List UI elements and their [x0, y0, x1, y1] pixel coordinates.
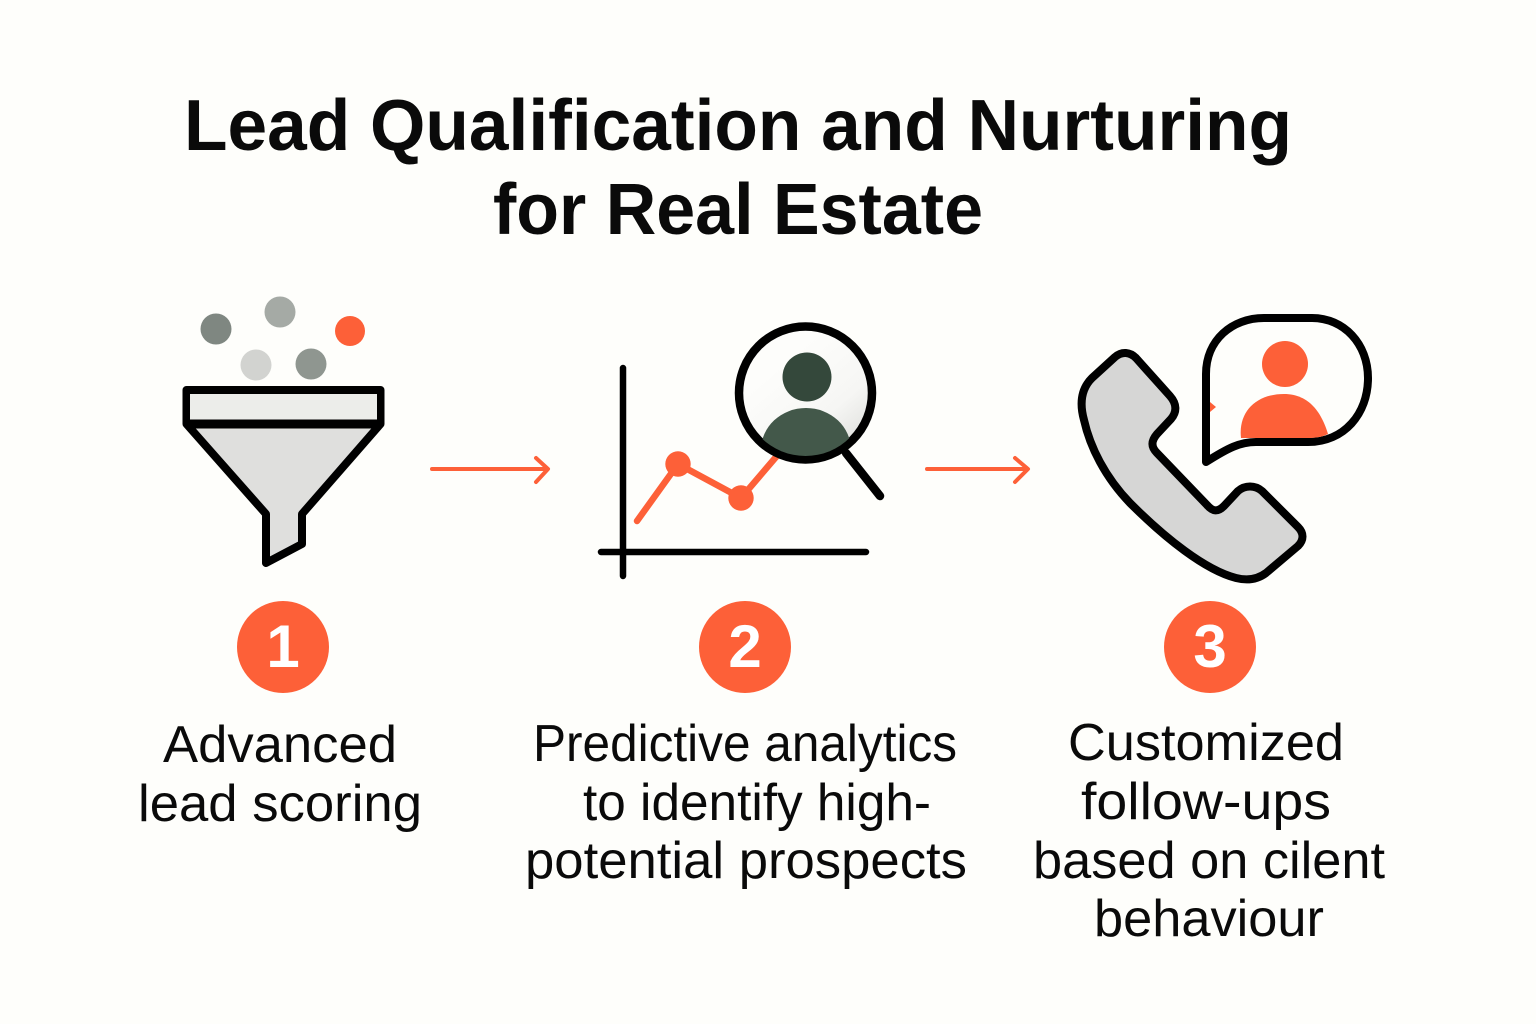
step 3 text: Customized [1068, 714, 1344, 772]
step 3 text: based on cilent [1033, 832, 1386, 890]
title: for Real Estate [493, 170, 983, 250]
arrow 2 [927, 458, 1028, 482]
arrow 1 [432, 458, 548, 482]
step 2 text: Predictive analytics [533, 715, 957, 773]
step 1 text: lead scoring [138, 775, 422, 833]
step 2 text [525, 715, 967, 890]
step 3 badge: 3 [1193, 613, 1227, 680]
step 1 text: Advanced [163, 716, 397, 774]
title: Lead Qualification and Nurturing [184, 86, 1292, 166]
step 3 text: behaviour [1094, 890, 1324, 948]
icon: funnel with leads [186, 296, 380, 563]
icon: chart with magnifier [601, 326, 880, 576]
step 3 text: follow-ups [1081, 773, 1331, 831]
title [184, 86, 1292, 250]
icon: phone with speech bubble [1082, 318, 1368, 579]
step 3 badge [1164, 601, 1256, 693]
step 2 text: potential prospects [525, 832, 967, 890]
step 1 text [138, 716, 422, 833]
step 1 badge [237, 601, 329, 693]
step 2 badge [699, 601, 791, 693]
step 1 badge: 1 [266, 613, 300, 680]
step 2 badge: 2 [728, 613, 762, 680]
step 3 text [1033, 714, 1386, 948]
step 2 text: to identify high- [583, 774, 931, 832]
